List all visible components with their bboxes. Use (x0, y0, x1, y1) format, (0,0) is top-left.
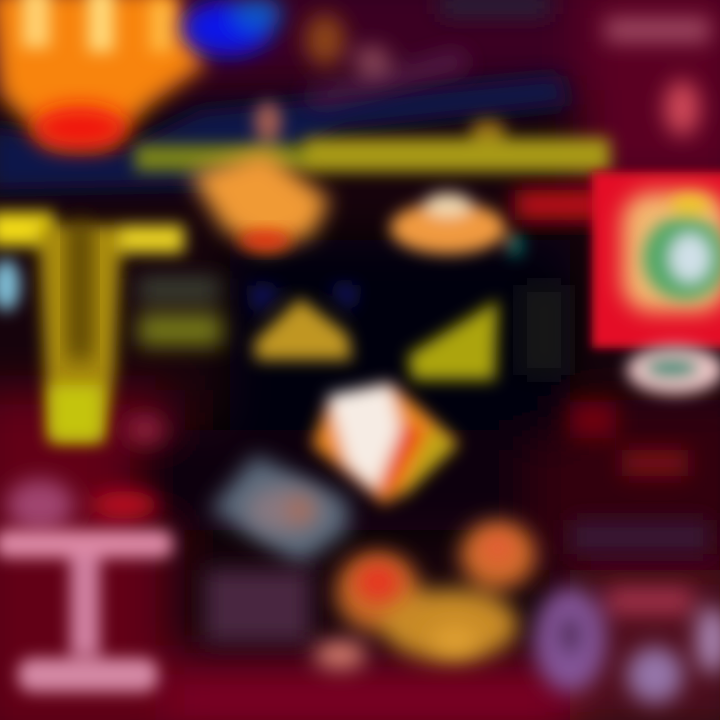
icon: yellow wedge (408, 300, 498, 380)
panel: dim block below grey shape (205, 570, 310, 642)
heading band: yellow-green (135, 102, 610, 172)
icon: yellow T shape (0, 212, 184, 442)
top decorative smudges (300, 14, 710, 136)
illustration: pink table (0, 416, 173, 692)
red bar (515, 190, 605, 220)
panel: grey-blue rounded shape (210, 455, 348, 565)
panel: red framed medallion (592, 172, 720, 394)
text block: grid left (138, 278, 222, 346)
navy bands (0, 0, 570, 190)
icon: blue blob (182, 0, 282, 56)
illustration: golden lion (314, 521, 536, 669)
icon: golden triangle (250, 285, 358, 360)
illustration: purple script shape (534, 588, 720, 703)
icon: orange star left (190, 150, 330, 250)
text block: grid right (520, 285, 568, 375)
icon: top-left fan (0, 0, 205, 150)
pie chart: striped fan (312, 382, 458, 505)
icon: orange badge right (390, 193, 523, 257)
text block: red lines right (570, 402, 710, 554)
